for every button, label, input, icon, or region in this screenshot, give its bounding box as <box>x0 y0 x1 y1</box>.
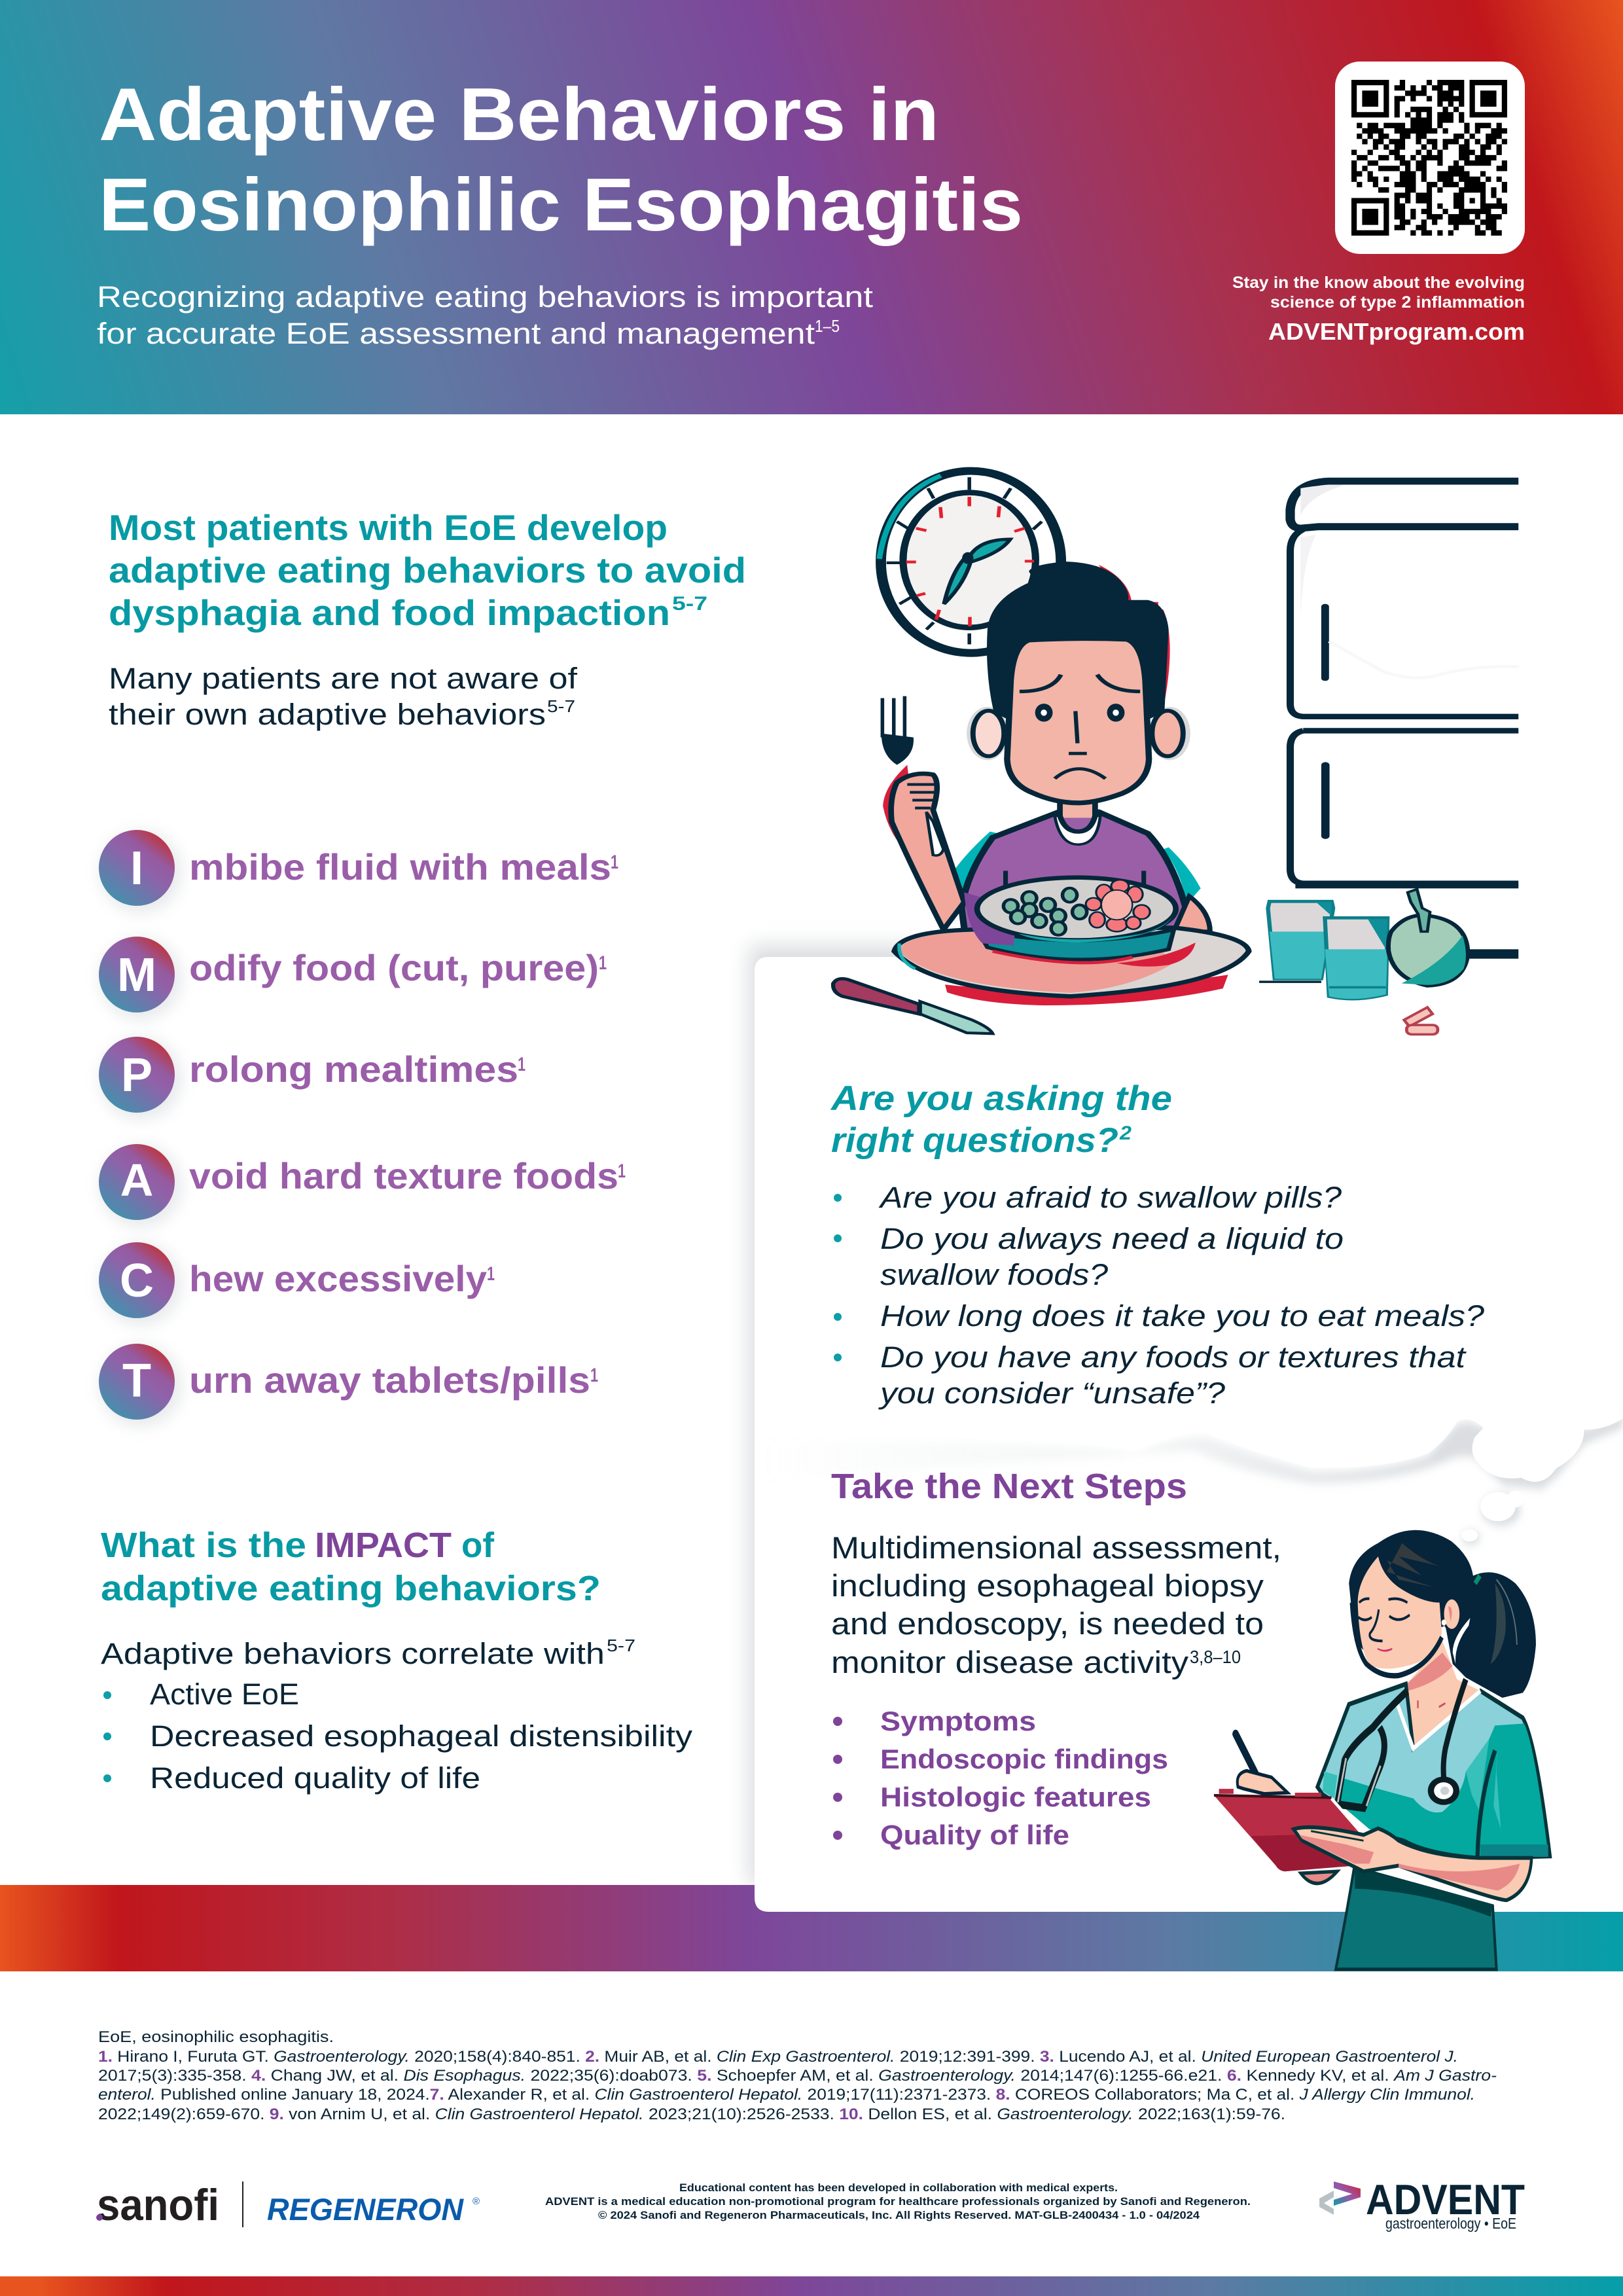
text: multidimensional assessment: and endoscopy, is needed to <box>831 1606 1264 1641</box>
item C: hew excessively <box>189 1258 487 1299</box>
impact list: 5-7 <box>607 1636 635 1655</box>
heading: impact: What is the <box>101 1526 306 1565</box>
bottom decorative strip <box>0 2276 1623 2296</box>
arm holding fork <box>882 696 1210 931</box>
title: Adaptive Behaviors in <box>99 73 939 156</box>
item C <box>99 1242 495 1325</box>
references: 1. Hirano I, Furuta GT. Gastroenterology. 2020;158(4):840-851. 2. Muir AB, et al. Clin Exp Gastroenterol. 2019;12:391-399. 3. Lucendo AJ, et al. United European Gastroenterol J. <box>98 2048 1458 2066</box>
heading: impact <box>101 1526 601 1608</box>
item M <box>99 937 607 1019</box>
questions list: you consider “unsafe”? <box>878 1376 1225 1410</box>
references: EoE, eosinophilic esophagitis. <box>98 2028 334 2046</box>
heading: next steps: Take the Next Steps <box>831 1467 1187 1506</box>
item A: 1 <box>618 1160 626 1182</box>
water glasses <box>1259 901 1387 999</box>
item T: 1 <box>590 1365 598 1386</box>
man <box>947 562 1201 947</box>
subtitle: 1–5 <box>815 316 840 336</box>
fridge <box>1290 481 1518 959</box>
thought cloud <box>756 1311 1623 1545</box>
item I: mbibe fluid with meals <box>189 846 611 888</box>
heading: right questions <box>830 1079 1172 1160</box>
white panel: questions and next steps <box>755 957 1623 1912</box>
text: patients not aware: 5-7 <box>547 696 575 716</box>
ponytail and hair back <box>1349 1530 1536 1698</box>
heading: right questions: right questions? <box>831 1121 1118 1160</box>
clipboard <box>1214 1795 1364 1871</box>
text: patients not aware: their own adaptive behaviors <box>109 698 546 731</box>
illustration: nurse <box>1214 1530 1550 1969</box>
heading: most patients <box>109 507 746 633</box>
scrub pants <box>1336 1867 1497 1969</box>
next steps list <box>833 1706 1168 1850</box>
next steps list: Symptoms <box>880 1706 1036 1736</box>
references: 2017;5(3):335-358. 4. Chang JW, et al. Dis Esophagus. 2022;35(6):doab073. 5. Schoepfer AM, et al. Gastroenterology. 2014;147(6):1255-66.e21. 6. Kennedy KV, et al. Am J Gastro- <box>98 2067 1497 2085</box>
disclaimer: © 2024 Sanofi and Regeneron Pharmaceuticals, Inc. All Rights Reserved. MAT-GLB-2400434 - 1.0 - 04/2024 <box>598 2210 1200 2221</box>
knife <box>833 978 993 1033</box>
next steps list: Quality of life <box>880 1820 1069 1850</box>
title: Eosinophilic Esophagitis <box>99 164 1023 247</box>
text: patients not aware: Many patients are not aware of <box>109 662 578 695</box>
item M: 1 <box>599 952 607 974</box>
logo: ADVENT: gastroenterology • EoE <box>1385 2215 1516 2232</box>
QR caption and program URL <box>1232 274 1525 345</box>
heading: right questions: 2 <box>1119 1122 1132 1144</box>
impact list <box>101 1636 693 1795</box>
heading: impact: of <box>461 1526 495 1565</box>
questions list: Do you have any foods or textures that <box>880 1340 1467 1374</box>
logo: ADVENT: ADVENT <box>1366 2176 1525 2223</box>
heading: right questions: Are you asking the <box>830 1079 1172 1118</box>
subtitle: Recognizing adaptive eating behaviors is important <box>97 280 874 314</box>
item I: I <box>130 842 143 895</box>
QR caption and program URL: Stay in the know about the evolving <box>1232 274 1525 292</box>
questions list <box>834 1181 1484 1410</box>
bowl with peas and meat <box>964 878 1176 963</box>
item A: A <box>120 1155 153 1206</box>
subtitle <box>97 280 874 350</box>
neck <box>1396 1641 1480 1748</box>
pen and writing hand <box>1236 1734 1258 1779</box>
disclaimer: ADVENT is a medical education non-promotional program for healthcare professionals organized by Sanofi and Regeneron. <box>545 2196 1251 2208</box>
IMPACT acronym list <box>99 830 626 1426</box>
illustration: patient at table <box>833 471 1518 1034</box>
cloud body <box>756 1311 1623 1482</box>
references <box>98 2028 1497 2123</box>
text: multidimensional assessment: including esophageal biopsy <box>831 1568 1264 1603</box>
questions list: Do you always need a liquid to <box>880 1222 1344 1255</box>
item I: 1 <box>611 852 618 873</box>
references: 2022;149(2):659-670. 9. von Arnim U, et al. Clin Gastroenterol Hepatol. 2023;21(10):2526-2533. 10. Dellon ES, et al. Gastroenterology. 2022;163(1):59-76. <box>98 2106 1285 2123</box>
item M: M <box>117 949 156 1001</box>
QR caption and program URL: science of type 2 inflammation <box>1270 293 1525 312</box>
logo: sanofi and Regeneron: REGENERON <box>267 2192 464 2227</box>
pills <box>1404 1007 1438 1034</box>
item C: C <box>120 1255 154 1307</box>
cloud shadow <box>756 1397 1623 1545</box>
text: multidimensional assessment: Multidimensional assessment, <box>831 1530 1281 1565</box>
heading: most patients: Most patients with EoE develop <box>109 507 668 548</box>
impact list: Reduced quality of life <box>150 1761 480 1795</box>
disclaimer: Educational content has been developed in collaboration with medical experts. <box>679 2182 1118 2194</box>
item T: urn away tablets/pills <box>189 1359 590 1401</box>
arm holding clipboard <box>1301 1871 1337 1884</box>
item C: 1 <box>487 1263 495 1285</box>
item P <box>99 1037 526 1119</box>
logo: ADVENT <box>1319 2176 1525 2232</box>
item T: T <box>122 1355 151 1407</box>
text: patients not aware <box>109 662 578 731</box>
references: enterol. Published online January 18, 2024. 7. Alexander R, et al. Clin Gastroenterol Hepatol. 2019;17(11):2371-2373. 8. COREOS Collaborators; Ma C, et al. J Allergy Clin Immunol. <box>98 2086 1475 2104</box>
item P: 1 <box>518 1054 526 1075</box>
heading: most patients: 5-7 <box>672 593 707 615</box>
questions list: How long does it take you to eat meals? <box>880 1299 1484 1333</box>
impact list: Decreased esophageal distensibility <box>150 1719 693 1753</box>
logo: sanofi and Regeneron: ® <box>473 2196 480 2207</box>
item A: void hard texture foods <box>189 1155 618 1196</box>
impact list: Adaptive behaviors correlate with <box>101 1637 605 1670</box>
table plate <box>895 927 1249 1005</box>
heading: most patients: dysphagia and food impaction <box>109 592 670 633</box>
logo: sanofi and Regeneron <box>96 2180 480 2230</box>
heading: most patients: adaptive eating behaviors to avoid <box>109 550 746 590</box>
text: multidimensional assessment <box>831 1530 1281 1679</box>
clock <box>880 471 1061 653</box>
panel drop shadow <box>749 946 1230 1885</box>
stethoscope <box>1337 1679 1466 1808</box>
scrub top <box>1317 1684 1550 1858</box>
next steps list: Histologic features <box>880 1782 1151 1812</box>
impact list: Active EoE <box>150 1677 299 1711</box>
next steps list: Endoscopic findings <box>880 1744 1168 1774</box>
item P: rolong mealtimes <box>189 1049 518 1090</box>
item I <box>99 830 618 912</box>
header band <box>0 0 1623 414</box>
face <box>1358 1556 1442 1668</box>
questions list: swallow foods? <box>880 1258 1108 1291</box>
subtitle: for accurate EoE assessment and management <box>97 317 815 350</box>
small puffs <box>1461 1490 1524 1541</box>
item A <box>99 1144 626 1227</box>
text: multidimensional assessment: 3,8–10 <box>1190 1647 1241 1667</box>
questions list: Are you afraid to swallow pills? <box>878 1181 1342 1214</box>
item P: P <box>121 1049 152 1102</box>
text: multidimensional assessment: monitor disease activity <box>831 1645 1189 1679</box>
gradient band behind panel <box>0 1885 1623 1971</box>
logo: sanofi and Regeneron: sanofi <box>97 2180 219 2230</box>
QR caption and program URL: ADVENTprogram.com <box>1268 318 1525 345</box>
apple <box>1388 889 1468 986</box>
item M: odify food (cut, puree) <box>189 947 599 988</box>
QR code card <box>1335 62 1525 254</box>
heading: impact: adaptive eating behaviors? <box>101 1569 601 1608</box>
title <box>99 73 1023 247</box>
heading: impact: IMPACT <box>315 1526 452 1565</box>
disclaimer <box>545 2182 1251 2221</box>
item T <box>99 1344 598 1426</box>
